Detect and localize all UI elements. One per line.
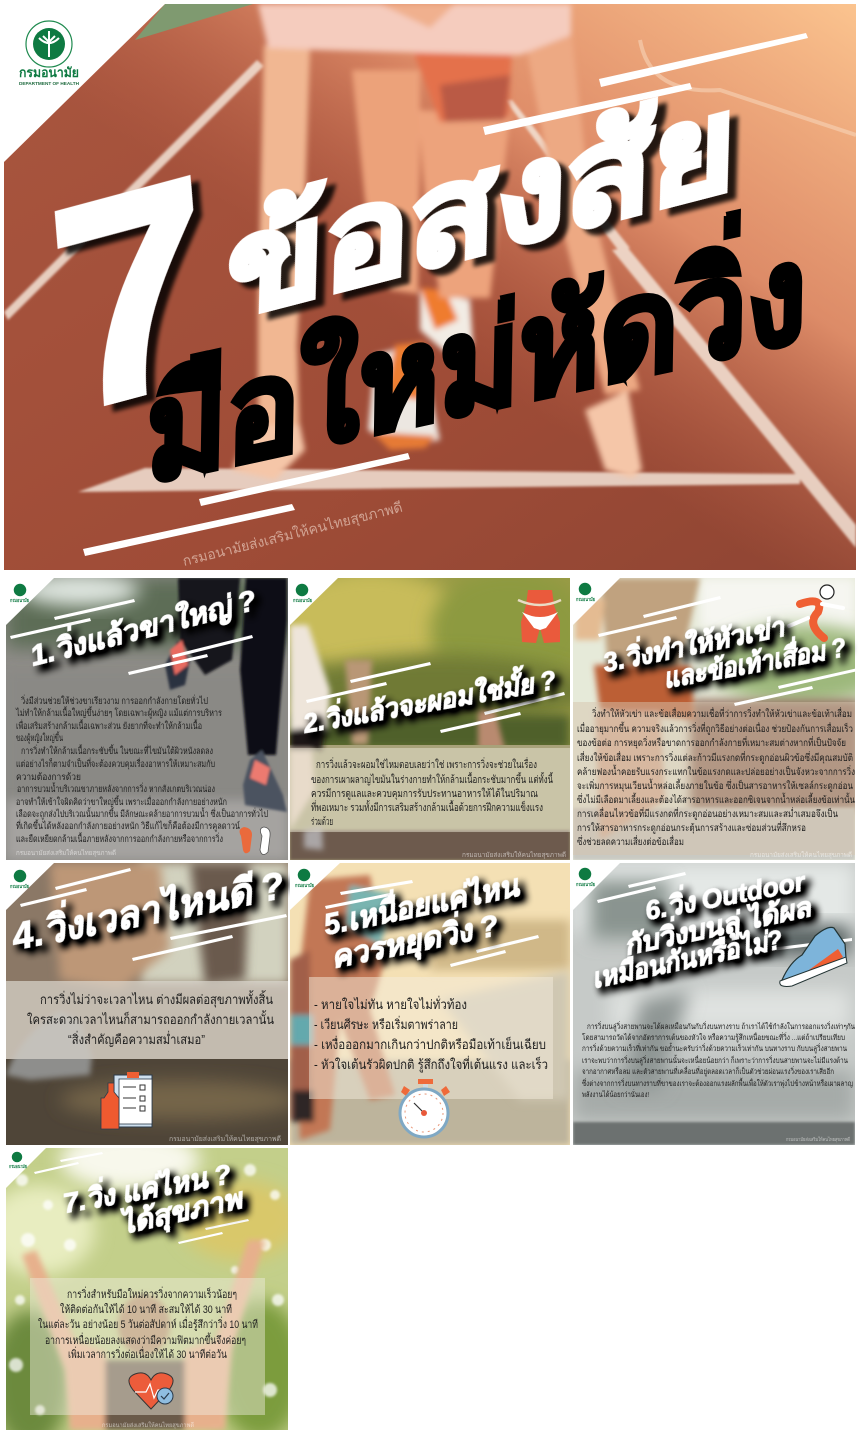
logo corner: กรมอนามัย	[10, 883, 29, 890]
watermark: กรมอนามัยส่งเสริมให้คนไทยสุขภาพดี	[181, 499, 404, 570]
shorts	[412, 48, 512, 122]
body text: อาการเหนื่อยน้อยลงแสดงว่ามีความฟิตมากขึ้นจึงค่อยๆ	[45, 1332, 246, 1347]
heading: doubts: ข้อสงสัย	[197, 72, 752, 345]
decorative stripes	[83, 33, 808, 556]
body text: อาจทำให้เข้าใจผิดคิดว่าขาใหญ่ขึ้น เพราะเมื่อออกกำลังกายอย่างหนัก	[16, 795, 227, 807]
logo text: กรมอนามัย	[19, 65, 79, 80]
heading: 1.วิ่งแล้วขาใหญ่ ?	[25, 579, 260, 674]
photo: runner on bridge	[573, 578, 855, 860]
translucent text panel	[6, 981, 288, 1059]
heading: 4.วิ่งเวลาไหนดี ?	[6, 858, 288, 959]
body text: ใครสะดวกเวลาไหนก็สามารถออกกำลังกายเวลานั้น	[27, 1010, 274, 1027]
body text: เพื่อเสริมสร้างกล้ามเนื้อเฉพาะส่วน ยังยากที่จะทำให้กล้ามเนื้อ	[16, 719, 202, 731]
logo corner	[290, 863, 340, 910]
heading	[60, 1153, 247, 1242]
logo corner	[6, 578, 54, 625]
panel: question 2	[280, 570, 590, 860]
icon: bottle and checklist	[101, 1072, 152, 1129]
symptom list: - หัวใจเต้นรัวผิดปกติ รู้สึกถึงใจที่เต้นแรง และเร็ว	[314, 1055, 548, 1073]
heading: 2.วิ่งแล้วจะผอมใช่มั้ย ?	[299, 659, 558, 739]
stripes	[306, 662, 565, 733]
translucent text panel	[573, 702, 855, 855]
photo: runner with raised arms	[6, 1148, 288, 1430]
symptom list: - เวียนศีรษะ หรือเริ่มตาพร่าลาย	[314, 1016, 458, 1032]
symptom list	[314, 996, 548, 1073]
body text: แต่อย่างไรก็ตามจำเป็นที่จะต้องควบคุมเรื่องอาหารให้เหมาะสมกับ	[16, 757, 215, 770]
body text	[577, 707, 855, 848]
heading: 6.วิ่ง Outdoor	[642, 861, 809, 926]
body text: ให้ติดต่อกันให้ได้ 10 นาที สะสมให้ได้ 30 นาที	[60, 1303, 232, 1316]
stripes	[20, 868, 287, 961]
body text: พลังงานได้น้อยกว่านั่นเอง!	[582, 1089, 649, 1099]
body text	[27, 990, 274, 1047]
logo corner	[290, 578, 338, 625]
panel: question 5	[290, 863, 570, 1145]
symptom list: - หายใจไม่ทัน หายใจไม่ทั่วท้อง	[314, 996, 467, 1012]
panel: question 6	[573, 861, 856, 1145]
heading: beginner runners: มือใหม่หัดวิ่ง	[117, 201, 820, 509]
body text: วิ่งมีส่วนช่วยให้ช่วงขาเรียวงาม การออกกำลังกายโดยทั่วไป	[20, 694, 208, 706]
heading: number 7: 7	[17, 118, 259, 468]
body text	[15, 694, 268, 844]
panel: question 1	[6, 574, 288, 860]
photo: tying shoe	[6, 863, 288, 1145]
body text	[582, 1021, 856, 1099]
icon: stopwatch	[400, 1079, 450, 1137]
body text: เลือดจะถูกส่งไปบริเวณนั้นมากขึ้น มีลักษณะคล้ายอาการบวมน้ำ ซึ่งเป็นอาการทั่วไป	[16, 807, 268, 820]
body text: เพิ่มเวลาการวิ่งต่อเนื่องให้ได้ 30 นาทีต่อวัน	[68, 1346, 227, 1361]
heading	[589, 861, 815, 994]
body text: การให้สารอาหารกระดูกอ่อนกระตุ้นการสร้างและซ่อมส่วนที่สึกหรอ	[577, 821, 806, 834]
icon: footprints	[240, 827, 270, 855]
body text: ควรมีการดูแลและควบคุมการรับประทานอาหารให้ได้ในปริมาณ	[311, 787, 538, 800]
heading: 7.วิ่ง แค่ไหน ?	[60, 1153, 233, 1219]
heading: 5.เหนื่อยแค่ไหน	[320, 864, 523, 942]
body text: ความต้องการด้วย	[16, 772, 81, 782]
icon: ministry seal	[26, 21, 72, 67]
logo corner	[4, 4, 165, 162]
logo corner: DEPARTMENT OF HEALTH	[19, 81, 80, 86]
body text: การวิ่งทำให้กล้ามเนื้อกระชับขึ้น ในขณะที่ไขมันใต้ผิวหนังลดลง	[21, 744, 213, 756]
logo corner	[6, 1148, 46, 1188]
stripes	[10, 599, 253, 675]
logo corner: กรมอนามัย	[9, 1164, 27, 1169]
body text: การวิ่งไม่ว่าจะเวลาไหน ต่างมีผลต่อสุขภาพทั้งสิ้น	[40, 990, 273, 1008]
heading	[320, 864, 523, 977]
logo corner	[6, 863, 54, 910]
heading: กับวิ่งบนลู่ ได้ผล	[620, 887, 815, 963]
arms	[258, 45, 310, 440]
body text: การวิ่งแล้วจะผอมใช่ไหมตอบเลยว่าใช่ เพราะการวิ่งจะช่วยในเรื่อง	[316, 757, 537, 771]
stripes	[34, 1152, 249, 1244]
body text: ของการเผาผลาญไขมันในร่างกายทำให้กล้ามเนื้อกระชับมากขึ้น แต่ทั้งนี้	[311, 772, 553, 786]
body text: ที่พอเหมาะ รวมทั้งมีการเสริมสร้างกล้ามเนื้อด้วยการฝึกความแข็งแรง	[311, 800, 543, 814]
logo corner: กรมอนามัย	[293, 597, 312, 604]
body text: “สิ่งสำคัญคือความสม่ำเสมอ”	[68, 1031, 205, 1047]
heading	[599, 607, 848, 694]
logo corner: กรมอนามัย	[576, 596, 595, 603]
body text	[311, 757, 553, 828]
photo: tired runner on road	[290, 863, 570, 1145]
heading: ควรหยุดวิ่ง ?	[327, 903, 501, 977]
panel: hero cover	[4, 4, 856, 570]
shirt	[258, 4, 571, 55]
watermark: กรมอนามัยส่งเสริมให้คนไทยสุขภาพดี	[16, 849, 116, 857]
hero photo: runner on track	[4, 4, 856, 570]
stripes	[597, 872, 852, 951]
stripes	[325, 880, 539, 967]
thighs	[352, 70, 420, 294]
front shoe	[368, 342, 440, 448]
heading: ได้สุขภาพ	[116, 1181, 247, 1242]
logo corner: กรมอนามัย	[10, 597, 29, 604]
logo corner	[573, 863, 620, 910]
watermark: กรมอนามัยส่งเสริมให้คนไทยสุขภาพดี	[102, 1421, 194, 1429]
back shoe	[420, 290, 473, 352]
body text	[38, 1286, 258, 1361]
body text: ที่เกิดขึ้นได้หลังออกกำลังกายอย่างหนัก วิธีแก้ไขก็คือต้องมีการคูลดาวน์	[16, 819, 241, 832]
symptom list: - เหงื่อออกมากเกินกว่าปกติหรือมือเท้าเย็นเฉียบ	[314, 1035, 546, 1052]
body text: อาการบวมน้ำบริเวณขาภายหลังจากการวิ่ง หากสังเกตบริเวณน่อง	[17, 782, 215, 794]
watermark: กรมอนามัยส่งเสริมให้คนไทยสุขภาพดี	[750, 851, 852, 859]
body text: การวิ่งสำหรับมือใหม่ควรวิ่งจากความเร็วน้อยๆ	[67, 1286, 237, 1301]
watermark: กรมอนามัยส่งเสริมให้คนไทยสุขภาพดี	[169, 1134, 281, 1143]
translucent text panel	[309, 977, 553, 1099]
logo corner: กรมอนามัย	[576, 881, 595, 888]
heading: เหมือนกันหรือไม่?	[589, 923, 785, 994]
icon: running shoe	[780, 927, 847, 986]
translucent text panel	[30, 1278, 265, 1415]
body text: และยืดเหยียดกล้ามเนื้อภายหลังจากการออกกำลังกายหรือจากการวิ่ง	[16, 832, 223, 844]
photo: park runner	[290, 578, 570, 860]
icon: waist and tape	[518, 590, 561, 643]
photo: treadmills	[573, 863, 855, 1145]
heading: 3.วิ่งทำให้หัวเข่า	[599, 607, 788, 678]
icon: heart with check	[129, 1373, 173, 1409]
logo corner: กรมอนามัย	[295, 882, 314, 889]
body text: ซึ่งช่วยลดความเสี่ยงต่อข้อเสื่อม	[577, 835, 684, 848]
stripes	[598, 596, 858, 706]
body text: ของผู้หญิงใหญ่ขึ้น	[16, 731, 63, 744]
hands	[232, 425, 305, 480]
icon: running figure	[789, 585, 843, 638]
panel: question 4	[6, 858, 300, 1145]
panel: question 7	[0, 1130, 305, 1436]
logo corner	[573, 578, 620, 625]
panel: question 3	[573, 578, 860, 860]
body text: ร่วมด้วย	[311, 816, 333, 828]
watermark: กรมอนามัยส่งเสริมให้คนไทยสุขภาพดี	[462, 851, 566, 859]
body text: ไม่ทำให้กล้ามเนื้อใหญ่ขึ้นง่ายๆ โดยเฉพาะผู้หญิง แม้แต่การบริหาร	[15, 706, 222, 719]
translucent text panel	[290, 748, 570, 832]
photo: runner legs	[6, 578, 288, 860]
body text: ในแต่ละวัน อย่างน้อย 5 วันต่อสัปดาห์ เมื่อรู้สึกว่าวิ่ง 10 นาที	[38, 1316, 258, 1331]
